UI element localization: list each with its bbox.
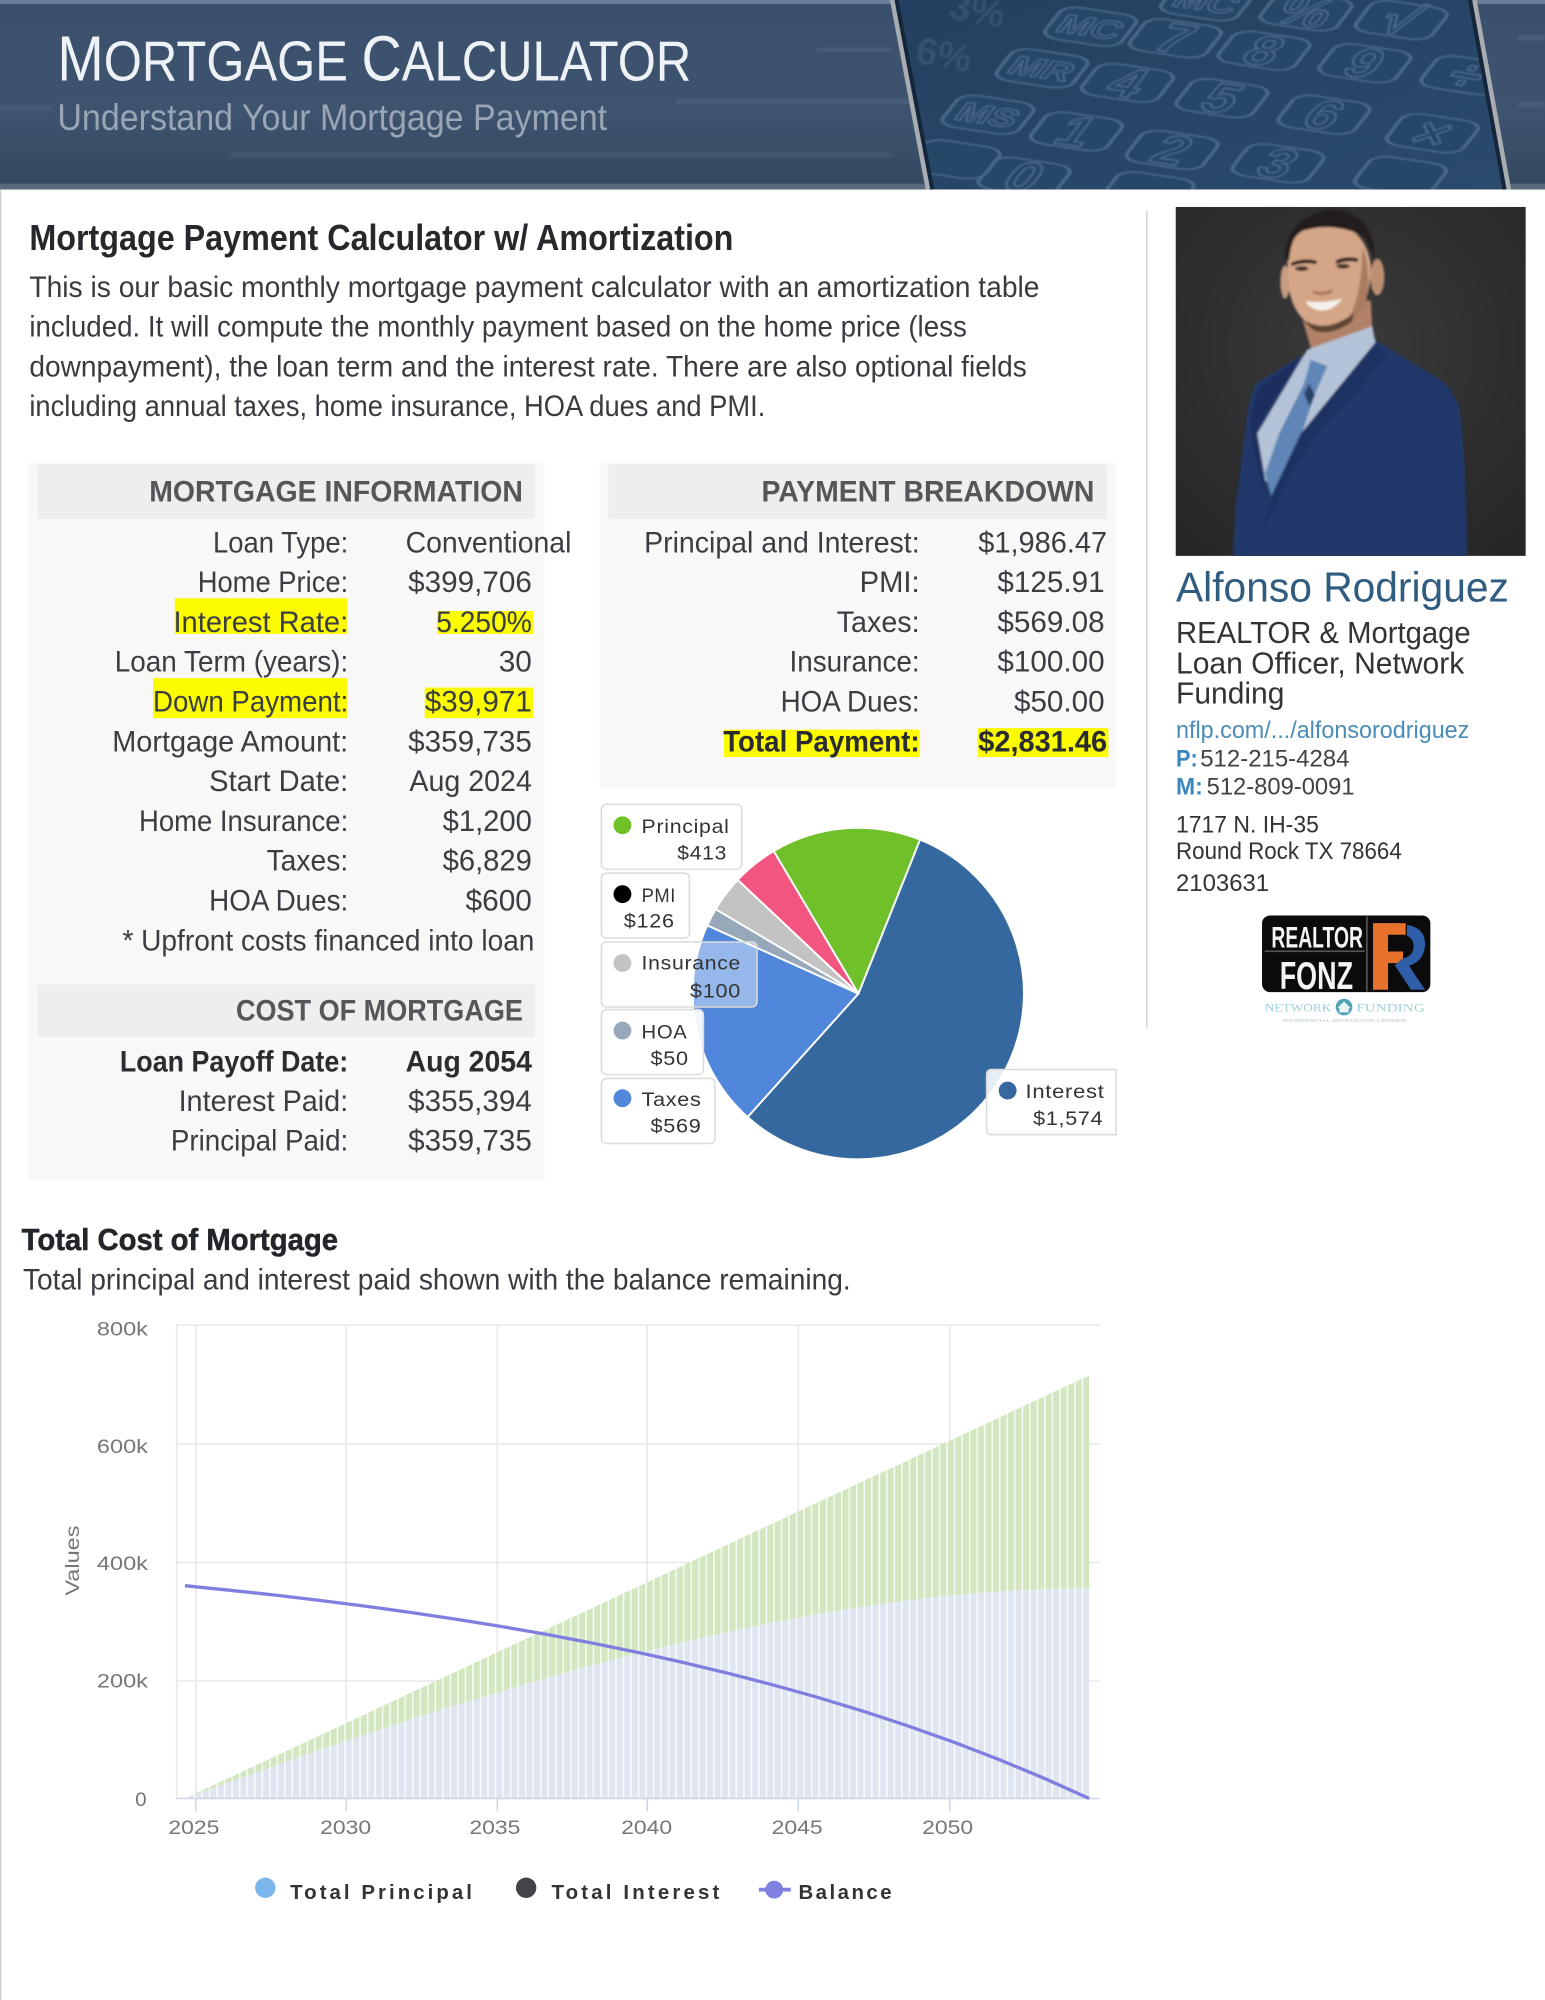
- x axis labels: 2050: [922, 1818, 973, 1839]
- y axis labels: 200k: [97, 1671, 148, 1692]
- payment rows: $2,831.46: [978, 725, 1107, 758]
- mortgage information rows: $600: [466, 884, 532, 917]
- calculator graphic: 9: [1332, 40, 1397, 88]
- mortgage information rows: $39,971: [425, 685, 532, 718]
- calculator graphic: MR: [1001, 50, 1083, 87]
- calculator graphic: 6: [1291, 91, 1356, 139]
- balance line: [185, 1586, 1089, 1798]
- pie label: taxes: $569: [650, 1117, 702, 1138]
- smile: [1306, 299, 1342, 310]
- pie label: pmi: $126: [624, 911, 675, 932]
- face: [1287, 224, 1371, 331]
- pie label: principal: Principal: [642, 817, 730, 838]
- mortgage information rows: Loan Type:: [213, 526, 348, 559]
- mortgage information rows: $6,829: [443, 845, 532, 878]
- cost of mortgage rows: $355,394: [408, 1085, 532, 1118]
- heading: calculator: Mortgage Payment Calculator w/ Amortization: [29, 218, 733, 258]
- agent contact: 512-809-0091: [1207, 774, 1355, 801]
- chart legend: Total Principal: [290, 1882, 472, 1904]
- logo: realtor fonz: NETWORK: [1265, 1000, 1332, 1014]
- payment rows: $50.00: [1014, 685, 1105, 718]
- agent address: 2103631: [1176, 870, 1269, 897]
- title: MORTGAGE CALCULATOR: [57, 22, 691, 94]
- mortgage information rows: HOA Dues:: [209, 884, 348, 917]
- payment rows: $1,986.47: [978, 526, 1107, 559]
- mortgage information rows: $1,200: [443, 805, 532, 838]
- highlights: [153, 598, 533, 718]
- header banner: [0, 0, 1545, 213]
- eyes: [1295, 266, 1308, 271]
- heading: total cost of mortgage: Total Cost of Mortgage: [22, 1223, 338, 1257]
- hair: [1285, 210, 1376, 262]
- interest stacked bars: [185, 1376, 1089, 1798]
- pie label: taxes: Taxes: [642, 1090, 702, 1111]
- y axis labels: 0: [135, 1790, 147, 1811]
- payment rows: Taxes:: [837, 606, 920, 639]
- agent photo: [1176, 207, 1526, 564]
- calculator graphic: 0: [992, 153, 1056, 201]
- mortgage information rows: Interest Rate:: [173, 606, 348, 639]
- cost of mortgage rows: Principal Paid:: [171, 1125, 348, 1158]
- mortgage information rows: Home Insurance:: [139, 805, 348, 838]
- intro paragraph: This is our basic monthly mortgage payment calculator with an amortization table: [29, 271, 1040, 304]
- neck: [1299, 300, 1372, 354]
- x axis labels: [168, 1818, 973, 1839]
- panel: payment breakdown: [599, 463, 1116, 787]
- area chart: total cost of mortgage: [63, 1319, 1099, 1904]
- cost of mortgage rows: Interest Paid:: [179, 1085, 348, 1118]
- payment rows: Principal and Interest:: [644, 526, 920, 559]
- calculator graphic: ×: [1399, 109, 1465, 158]
- ears: [1280, 265, 1290, 299]
- cost of mortgage rows: $359,735: [408, 1125, 532, 1158]
- payment rows: Insurance:: [790, 646, 920, 679]
- agent title: [1176, 616, 1471, 710]
- chart legend: [255, 1878, 892, 1904]
- pie label: taxes: [601, 1078, 715, 1143]
- calculator graphic: 8: [1231, 27, 1296, 75]
- pie label: hoa: $50: [650, 1049, 689, 1070]
- logo: realtor fonz: FONZ: [1280, 954, 1353, 998]
- heading: mortgage information: MORTGAGE INFORMATION: [149, 476, 523, 509]
- y axis labels: 400k: [97, 1554, 148, 1575]
- payment rows: $569.08: [997, 606, 1105, 639]
- calculator graphic: [892, 0, 1522, 213]
- payment rows: Total Payment:: [723, 725, 920, 758]
- intro paragraph: downpayment), the loan term and the interest rate. There are also optional fields: [29, 350, 1027, 383]
- pie label: pmi: PMI: [642, 886, 676, 907]
- mortgage information rows: 30: [499, 646, 532, 679]
- calculator graphic: 5: [1189, 74, 1254, 123]
- calculator graphic: 1: [1044, 108, 1109, 156]
- payment rows: $100.00: [997, 646, 1105, 679]
- mortgage information rows: Home Price:: [198, 566, 348, 599]
- mortgage information rows: Down Payment:: [153, 685, 348, 718]
- pie label: pmi: [601, 873, 689, 938]
- agent contact: P:: [1176, 746, 1198, 773]
- pie label: hoa: [601, 1010, 703, 1075]
- shirt and collar: [1257, 326, 1376, 482]
- panel: mortgage information and cost of mortgage: [28, 463, 571, 1180]
- cost of mortgage rows: Loan Payoff Date:: [120, 1045, 348, 1078]
- calculator graphic: 7: [1143, 15, 1207, 63]
- pie chart: [601, 804, 1116, 1159]
- intro paragraph: included. It will compute the monthly payment based on the home price (less: [29, 311, 967, 344]
- y axis labels: 800k: [97, 1319, 148, 1340]
- mortgage information rows: Mortgage Amount:: [112, 725, 348, 758]
- page left border: [0, 190, 1, 2000]
- pie label: interest: Interest: [1025, 1082, 1105, 1103]
- mortgage information rows: * Upfront costs financed into loan: [122, 924, 534, 957]
- mortgage information rows: $359,735: [408, 725, 532, 758]
- pie label: principal: $413: [677, 844, 727, 865]
- calculator graphic: 4: [1095, 59, 1160, 107]
- agent contact: nflp.com/.../alfonsorodriguez: [1176, 717, 1469, 744]
- mortgage information rows: Loan Term (years):: [115, 646, 348, 679]
- calculator graphic: 3: [1245, 140, 1310, 188]
- x axis labels: 2025: [168, 1818, 219, 1839]
- pie label: insurance: [601, 942, 757, 1007]
- left lapel: [1251, 357, 1301, 510]
- mortgage information rows: [112, 526, 571, 957]
- column divider: [1146, 210, 1148, 1028]
- agent title: REALTOR & Mortgage: [1176, 616, 1471, 650]
- nose shadow: [1312, 289, 1333, 295]
- x axis labels: 2040: [621, 1818, 672, 1839]
- calculator graphic: 2: [1140, 126, 1204, 174]
- x axis labels: 2030: [320, 1818, 371, 1839]
- mortgage information rows: Taxes:: [267, 845, 348, 878]
- cost of mortgage rows: Aug 2054: [406, 1045, 533, 1078]
- payment rows: HOA Dues:: [781, 685, 920, 718]
- chart legend: Total Interest: [552, 1882, 719, 1904]
- pie label: hoa: HOA: [642, 1022, 687, 1043]
- cost of mortgage rows: [120, 1045, 533, 1158]
- right lapel: [1270, 342, 1378, 502]
- agent name: Alfonso Rodriguez: [1176, 564, 1509, 611]
- intro paragraph: including annual taxes, home insurance, HOA dues and PMI.: [29, 390, 765, 423]
- payment rows: [644, 526, 1107, 758]
- heading: payment breakdown: PAYMENT BREAKDOWN: [761, 476, 1094, 509]
- chart grid: [176, 1325, 1099, 1798]
- agent address: [1176, 812, 1402, 897]
- calculator graphic: MS: [948, 97, 1028, 133]
- agent contact: M:: [1176, 774, 1203, 801]
- suit: [1232, 340, 1467, 564]
- brows: [1291, 257, 1358, 266]
- agent title: Loan Officer, Network: [1176, 646, 1465, 680]
- agent contact: [1176, 717, 1469, 801]
- y axis labels: 600k: [97, 1437, 148, 1458]
- mortgage information rows: Start Date:: [209, 765, 348, 798]
- tie: [1265, 360, 1327, 500]
- mortgage information rows: Aug 2024: [409, 765, 532, 798]
- agent title: Funding: [1176, 676, 1284, 710]
- subtitle: Understand Your Mortgage Payment: [57, 97, 607, 138]
- pie label: interest: $1,574: [1033, 1109, 1103, 1130]
- logo: realtor fonz: [1262, 915, 1430, 1024]
- x axis labels: 2045: [772, 1818, 823, 1839]
- mortgage information rows: Conventional: [406, 526, 571, 559]
- logo: realtor fonz: FUNDING: [1356, 1000, 1425, 1014]
- calculator graphic: ÷: [1434, 52, 1499, 100]
- logo: realtor fonz: RESIDENTIAL MORTGAGE LENDER: [1283, 1018, 1407, 1024]
- y axis labels: [63, 1319, 148, 1811]
- agent contact: 512-215-4284: [1200, 746, 1349, 773]
- heading: cost of mortgage: COST OF MORTGAGE: [236, 994, 523, 1027]
- pie label: principal: [601, 804, 742, 869]
- y axis labels: Values: [63, 1526, 84, 1596]
- calculator graphic: 6%: [913, 29, 975, 81]
- logo: realtor fonz: REALTOR: [1271, 921, 1363, 954]
- beard shadow: [1302, 313, 1354, 332]
- pie label: insurance: Insurance: [642, 953, 741, 974]
- total highlight: [724, 728, 1108, 757]
- payment rows: PMI:: [860, 566, 920, 599]
- agent address: Round Rock TX 78664: [1176, 838, 1402, 865]
- principal stacked bars: [185, 1588, 1089, 1798]
- x axis labels: 2035: [469, 1818, 520, 1839]
- chart description: Total principal and interest paid shown with the balance remaining.: [23, 1264, 851, 1297]
- calculator graphic: MC: [1049, 9, 1131, 46]
- axis baseline and ticks: [176, 1798, 1099, 1811]
- pie label: interest: [987, 1070, 1116, 1135]
- pie label: insurance: $100: [690, 981, 741, 1002]
- chart legend: Balance: [798, 1882, 892, 1904]
- bar gaps: [185, 1376, 1089, 1798]
- payment rows: $125.91: [997, 566, 1105, 599]
- mortgage information rows: $399,706: [408, 566, 532, 599]
- mortgage information rows: 5.250%: [436, 606, 532, 639]
- agent address: 1717 N. IH-35: [1176, 812, 1319, 839]
- intro paragraph: [29, 271, 1040, 423]
